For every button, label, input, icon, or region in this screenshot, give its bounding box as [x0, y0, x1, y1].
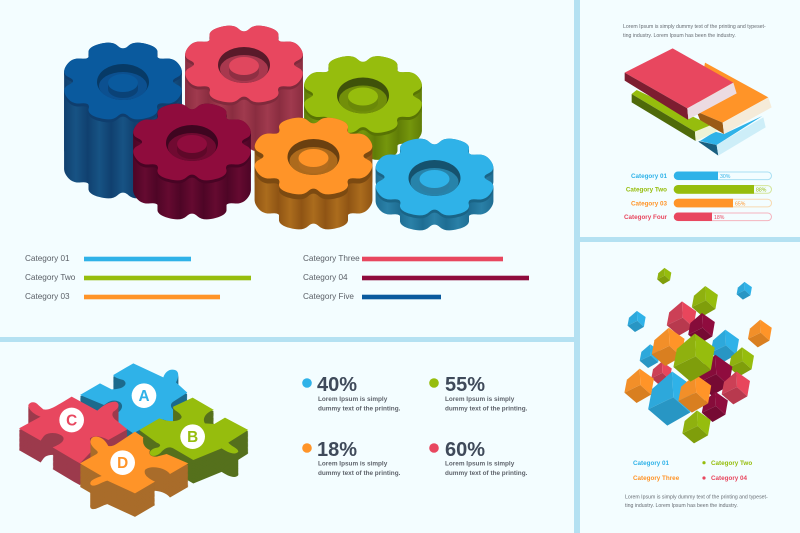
legend: gears: Category 03: [25, 292, 70, 301]
stat: 55%: 55%: [445, 374, 485, 396]
puzzle piece C: C: [66, 412, 77, 429]
progress: category two: 88%: [756, 188, 767, 194]
stat: 40%: 40%: [317, 374, 357, 396]
stat: 18%: 18%: [317, 439, 357, 461]
legend: cubes: Category Two: [711, 460, 752, 467]
legend: cubes: [633, 460, 752, 482]
book: blue: [698, 116, 766, 156]
stat: 60%: 60%: [445, 439, 485, 461]
progress: category 03: [631, 199, 772, 207]
gear: light blue: [376, 139, 493, 230]
gear: orange: [255, 118, 372, 229]
legend: gears: Category Five: [303, 292, 354, 301]
gear: crimson: [133, 104, 251, 219]
legend: gears: Category 01: [25, 254, 70, 263]
stat: 60%: [429, 439, 528, 477]
stat: 55%: Lorem Ipsum is simply: [445, 396, 515, 403]
puzzle piece B: [139, 398, 248, 483]
stat: 18%: dummy text of the printing.: [318, 470, 401, 477]
stat: 55%: [429, 374, 528, 412]
gear: green: [304, 56, 422, 160]
stat: 60%: dummy text of the printing.: [445, 470, 528, 477]
progress: category four: Category Four: [624, 214, 668, 221]
legend: gears: Category Two: [25, 273, 76, 282]
illustration: cubes: [624, 268, 772, 443]
legend: cubes: Category 01: [633, 460, 670, 467]
legend: gears: [25, 254, 529, 301]
legend: gears: Category 04: [303, 273, 348, 282]
progress: category 03: Category 03: [631, 200, 667, 207]
book: green: [632, 90, 717, 141]
text block: top right intro: Lorem Ipsum is simply dummy text of the printing and typeset-: [623, 24, 766, 30]
book: red: [625, 48, 737, 120]
puzzle piece A: A: [138, 388, 150, 405]
text block: top right intro: ting industry. Lorem Ipsum has been the industry.: [623, 33, 736, 39]
gear: red: [185, 26, 303, 151]
stat: 40%: dummy text of the printing.: [318, 406, 401, 412]
stat: 40%: Lorem Ipsum is simply: [318, 396, 388, 403]
book: orange: [697, 63, 772, 134]
progress: category four: 18%: [714, 215, 725, 221]
legend: gears: Category Three: [303, 254, 360, 263]
puzzle piece A: [80, 363, 187, 447]
legend: cubes: Category 04: [711, 475, 748, 482]
progress: category four: [624, 212, 772, 221]
panel: gears: [64, 26, 493, 230]
progress: category 01: 30%: [720, 174, 731, 180]
puzzle piece D: D: [117, 455, 128, 472]
legend: cubes: Category Three: [633, 475, 680, 482]
puzzle piece B: B: [187, 429, 198, 446]
stat: 18%: Lorem Ipsum is simply: [318, 460, 388, 468]
panel: puzzle: [19, 363, 248, 517]
puzzle piece D: [80, 432, 188, 517]
progress: category 01: [631, 172, 772, 180]
stat: 55%: dummy text of the printing.: [445, 406, 528, 412]
text block: bottom right: Lorem Ipsum is simply dummy text of the printing and typeset-: [625, 494, 768, 500]
progress: category two: Category Two: [626, 187, 667, 194]
progress: category 03: 65%: [735, 201, 746, 207]
gear: dark blue: [64, 43, 182, 198]
stat: 40%: [302, 374, 401, 412]
stat: 18%: [302, 439, 401, 477]
illustration: books: [625, 48, 772, 156]
puzzle piece C: [19, 397, 127, 485]
text block: bottom right: ting industry. Lorem Ipsum has been the industry.: [625, 503, 738, 509]
progress: category two: [626, 185, 772, 194]
progress: category 01: Category 01: [631, 173, 667, 180]
progress bars: books: [624, 172, 772, 221]
stat: 60%: Lorem Ipsum is simply: [445, 460, 515, 468]
